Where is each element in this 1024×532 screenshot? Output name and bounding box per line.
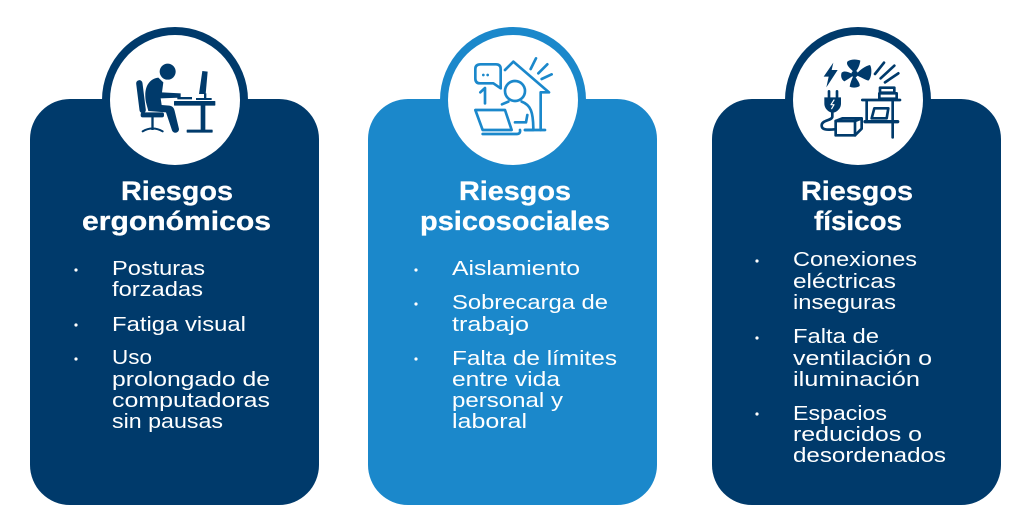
list: riesgos ergonómicos: computadoras — [112, 389, 270, 412]
list: riesgos ergonómicos — [74, 257, 270, 433]
list: riesgos físicos: desordenados — [793, 444, 946, 467]
heading: riesgos ergonómicos: Riesgos — [121, 176, 233, 206]
panel: riesgos ergonómicos — [30, 27, 319, 505]
list: riesgos físicos: ventilación o — [793, 347, 932, 370]
list: riesgos psicosociales: entre vida — [452, 368, 561, 391]
list: riesgos psicosociales: Aislamiento — [452, 257, 580, 280]
heading: riesgos psicosociales: Riesgos — [459, 176, 571, 206]
heading: riesgos físicos: Riesgos — [801, 176, 913, 206]
list: riesgos ergonómicos: forzadas — [112, 278, 203, 301]
list: riesgos físicos: Falta de — [793, 325, 879, 348]
list: riesgos psicosociales — [414, 257, 617, 433]
list: riesgos psicosociales: trabajo — [452, 313, 529, 336]
list: riesgos ergonómicos: Fatiga visual — [112, 313, 246, 336]
heading: riesgos psicosociales — [420, 176, 610, 236]
list: riesgos psicosociales: Falta de límites — [452, 347, 617, 370]
list: riesgos ergonómicos: Posturas — [112, 257, 205, 280]
panel: riesgos psicosociales — [368, 27, 657, 505]
list: riesgos psicosociales: personal y — [452, 389, 564, 412]
list: riesgos psicosociales: Sobrecarga de — [452, 291, 608, 314]
icon: remote worker at home — [475, 58, 552, 134]
list: riesgos ergonómicos: sin pausas — [112, 410, 223, 433]
list: riesgos físicos: eléctricas — [793, 270, 896, 293]
heading: riesgos físicos — [801, 176, 913, 236]
heading: riesgos físicos: físicos — [814, 206, 902, 236]
list: riesgos ergonómicos: Uso — [112, 346, 152, 369]
list: riesgos físicos: Conexiones — [793, 248, 917, 271]
icon: physical hazards — [822, 60, 900, 137]
panel: riesgos físicos — [712, 27, 1001, 505]
list: riesgos físicos: reducidos o — [793, 423, 922, 446]
list: riesgos ergonómicos: prolongado de — [112, 368, 270, 391]
icon: person at desk — [139, 64, 215, 133]
list: riesgos físicos: inseguras — [793, 291, 896, 314]
heading: riesgos psicosociales: psicosociales — [420, 206, 610, 236]
heading: riesgos ergonómicos: ergonómicos — [82, 206, 271, 236]
list: riesgos físicos: iluminación — [793, 368, 920, 391]
list: riesgos físicos: Espacios — [793, 402, 887, 425]
list: riesgos psicosociales: laboral — [452, 410, 527, 433]
list: riesgos físicos — [755, 248, 946, 467]
heading: riesgos ergonómicos — [82, 176, 271, 236]
